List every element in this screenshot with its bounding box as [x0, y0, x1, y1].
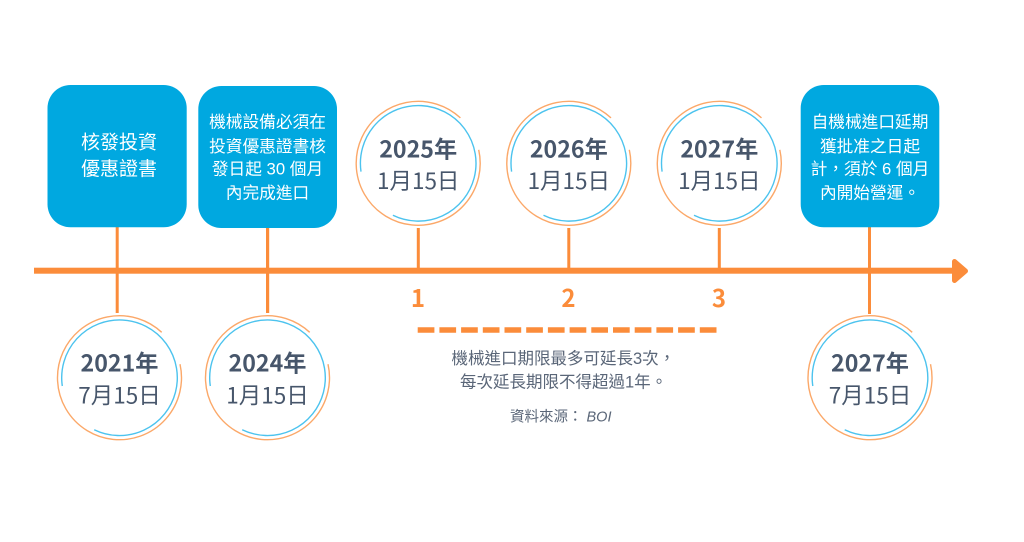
dashed extension span [418, 327, 717, 333]
date circle: 2027 July [808, 316, 932, 440]
timeline arrow [34, 262, 966, 280]
date circle: 2027 July: 2027年 [831, 345, 909, 379]
box: start operation: 計，須於 6 個月 [811, 156, 929, 180]
date circle: 2025 [356, 101, 480, 225]
box: machinery import deadline: 機械設備必須在 [209, 112, 326, 132]
source: BOI [586, 410, 611, 426]
date circle: 2027 January: 2027年 [680, 130, 758, 164]
box: start operation: 獲批准之日起 [820, 137, 920, 156]
extension numbers [411, 279, 726, 314]
box: start operation [801, 85, 939, 227]
date circle: 2025: 1月15日 [377, 164, 459, 196]
box: certificate issued [48, 85, 187, 227]
extension numbers: 1 [411, 279, 425, 314]
date circle: 2021: 2021年 [81, 345, 158, 379]
date circle: 2027 January [657, 101, 781, 225]
extension numbers: 3 [712, 279, 726, 314]
box: machinery import deadline: 內完成進口 [226, 184, 309, 202]
extension numbers: 2 [561, 279, 576, 314]
box: certificate issued: 核發投資 [81, 132, 157, 154]
date circle: 2021: 7月15日 [78, 378, 161, 410]
caption: 機械進口期限最多可延長3次， [452, 345, 675, 369]
box: start operation: 自機械進口延期 [812, 112, 928, 132]
caption: 每次延長期限不得超過1年。 [460, 368, 667, 392]
date circle: 2024 [205, 316, 329, 440]
date circle: 2026: 2026年 [530, 130, 608, 164]
date circle: 2027 July: 7月15日 [829, 378, 911, 410]
caption [452, 345, 675, 392]
date circle: 2026 [507, 101, 631, 225]
date circle: 2026: 1月15日 [528, 164, 610, 196]
box: start operation: 內開始營運。 [820, 180, 920, 204]
box: machinery import deadline: 發日起 30 個月 [212, 160, 323, 178]
date circle: 2024: 1月15日 [226, 378, 309, 410]
connector lines [116, 227, 871, 314]
box: machinery import deadline [198, 86, 337, 228]
source: ： [568, 406, 582, 426]
box: machinery import deadline: 投資優惠證書核 [209, 137, 326, 156]
source: 資料來源 [510, 410, 568, 426]
date circle: 2027 January: 1月15日 [678, 164, 761, 196]
box: certificate issued: 優惠證書 [81, 158, 157, 180]
date circle: 2025: 2025年 [379, 130, 457, 164]
date circle: 2024: 2024年 [229, 345, 306, 379]
date circle: 2021 [57, 316, 181, 440]
